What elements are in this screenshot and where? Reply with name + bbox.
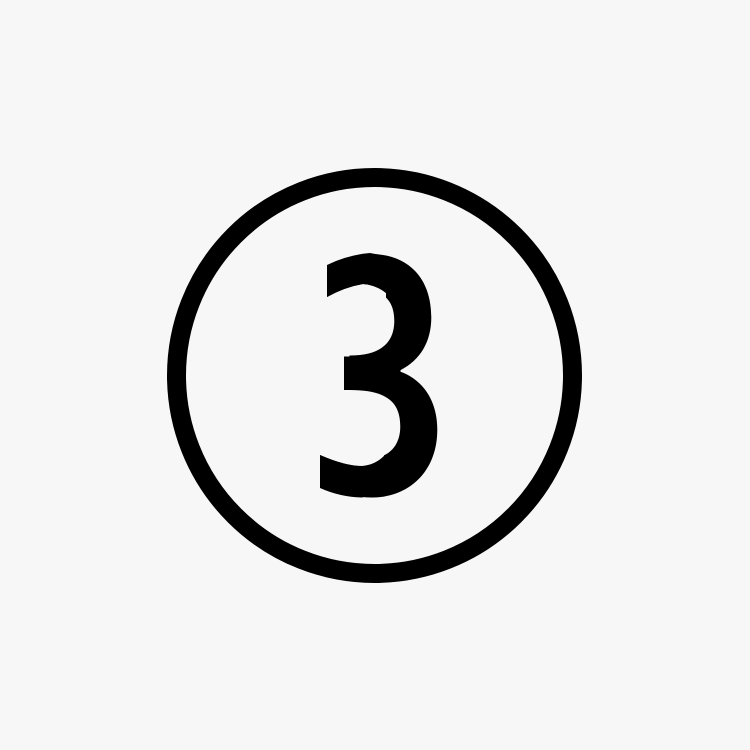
numeral 3: 3: [304, 117, 451, 587]
number badge: circled 3: [176, 117, 572, 587]
circle outline: [176, 178, 572, 574]
